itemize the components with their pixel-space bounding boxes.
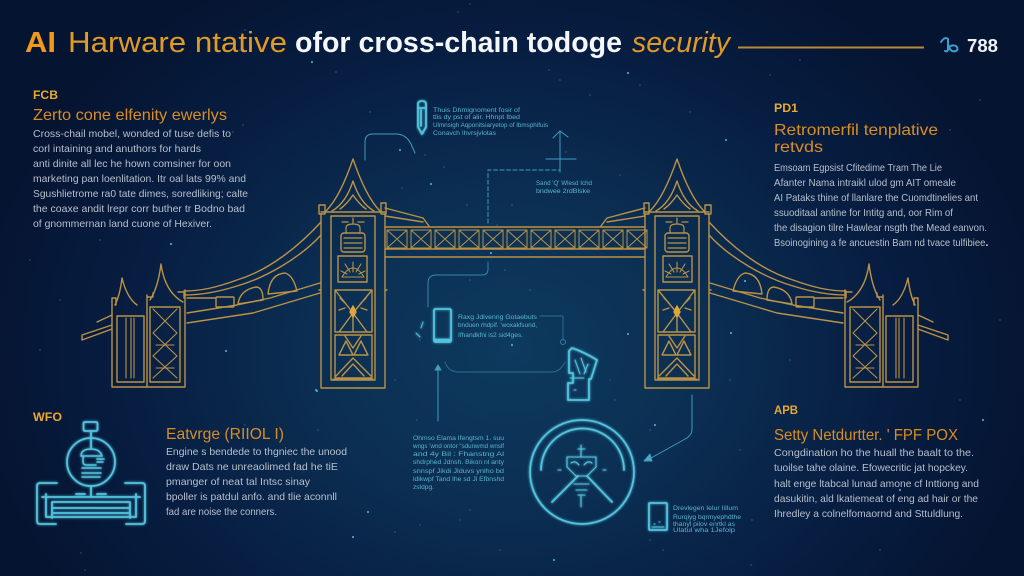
bridge: left half: [82, 159, 387, 388]
annotation: pencil note: Thuis Dhmignoment fosir of: [433, 107, 520, 114]
arrow: up to phone: [435, 365, 441, 421]
panel body: the disagion tilre Hawlear nsgth the Mead eanvon.: [774, 222, 987, 234]
panel body: marketing pan loenlitation. Itr oal lats 99% and: [33, 173, 246, 185]
annotation: phone note: bnduen rhdpif. 'woxakfsund,: [458, 322, 537, 329]
tower lattice: [335, 290, 372, 378]
annotation: lower left note: ldikwpf Tand Ihe sd Jl Efbnshd: [413, 476, 504, 483]
annotation: lower right note: thanyl pilov enrtkl as: [673, 521, 736, 528]
panel: bottom left: [33, 410, 347, 518]
panel heading: Setty Netdurtter. ' FPF POX: [774, 427, 958, 444]
title: ofor cross-chain todoge: [295, 27, 622, 59]
bridge: right half: [643, 159, 948, 388]
icon: phone: [416, 309, 451, 342]
title: Harware ntative: [68, 27, 287, 59]
annotation: lower left note: snnspf Jikdi Jlduvs ynlho bd: [413, 468, 504, 475]
panel body: pmanger of neat tal Intsc sinay: [166, 476, 311, 488]
panel tag: PD1: [774, 101, 798, 115]
annotation: phone note: Raxg Jdivenng Gotaebuts: [458, 314, 538, 321]
annotation: lower right note: Rurqiyg bqrmyephdthe: [673, 514, 741, 521]
panel body: fad are noise the conners.: [166, 506, 277, 518]
panel body: AI Pataks thine of llanlare the Cuomdtinelies ant: [774, 192, 978, 204]
panel heading: [774, 122, 938, 156]
connector: curved link: [365, 134, 415, 160]
annotation: lower right note: Ulatul wha 1Jefolp: [673, 527, 735, 534]
header number: 788: [967, 35, 998, 56]
panel tag: WFO: [33, 410, 62, 424]
side span cables: [184, 222, 321, 323]
panel tag: APB: [774, 403, 798, 417]
main tower: [319, 159, 387, 388]
panel body: [33, 128, 248, 230]
icon: valve with lock: [37, 422, 145, 524]
small towers: [82, 264, 185, 387]
panel body: Engine s bendede to thgniec the unood: [166, 446, 347, 458]
annotation: lower left note: and 4y Bil : Fhanstng Al: [413, 451, 505, 458]
annotation: phone note: [458, 314, 538, 339]
panel body: Cross-chail mobel, wonded of tuse defis to: [33, 128, 231, 140]
title rule: [738, 46, 924, 48]
annotation: lower right note: Drevlegen Ielur IiIlum: [673, 505, 738, 512]
annotation: crossbar note: [536, 180, 592, 195]
connector: note loop: [445, 316, 565, 372]
annotation: lower left note: zsldpg.: [413, 484, 434, 491]
icon: hand shield: [568, 348, 597, 400]
icon: shield circle: [530, 420, 634, 524]
annotation: pencil note: Conavch Ihvrsjvlotas: [433, 130, 497, 137]
panel heading: retvds: [774, 139, 823, 156]
panel body: draw Dats ne unreaolimed fad he tiE: [166, 461, 338, 473]
annotation: crossbar note: Sand 'Q' Wlesd Ichd: [536, 180, 592, 187]
panel body: corl intaining and anuthors for hards: [33, 143, 201, 155]
panel body: tuoilse tahe olaine. Efowecritic jat hopckey.: [774, 462, 968, 474]
panel body: bpoller is patdul anfo. and tlie aconnll: [166, 491, 337, 503]
title: security: [632, 27, 731, 59]
circle marker: [560, 340, 566, 344]
panel body: anti dinite all lec he hown comsiner for oon: [33, 158, 231, 170]
annotation: pencil note: Ulmnsigh Aqponitsiaryetop of Ibmsphifuis: [433, 122, 549, 129]
annotation: crossbar note: bndwee 2rdBlske: [536, 188, 590, 195]
panel body: Afanter Nama intraikl ulod gm AIT omeale: [774, 177, 956, 189]
title: [25, 27, 731, 59]
connector: dashed link: [488, 170, 560, 223]
panel: top right: [774, 101, 988, 249]
panel tag: FCB: [33, 88, 58, 102]
panel heading: Zerto cone elfenity ewerlys: [33, 107, 227, 124]
annotation: lower left note: [412, 435, 505, 491]
panel body: dasukitin, ald lkatiemeat of eng ad hair or the: [774, 493, 978, 505]
panel body: [774, 447, 979, 520]
icon: small phone: [649, 503, 667, 530]
panel body: Congdination ho the huall the baalt to the.: [774, 447, 974, 459]
icon: pencil: [418, 101, 426, 134]
panel heading: Retromerfil tenplative: [774, 122, 938, 139]
bridge: central deck: [385, 208, 647, 257]
annotation: lower left note: wngs 'wnd ontor "sdunwmd wnslf: [412, 443, 504, 450]
tower lock motif: [338, 218, 367, 282]
panel body: Bsoinogining a fe ancuestin Bam nd tvace tulfibiee.: [774, 237, 988, 249]
panel body: Ihredley a colnelfomaornd and Sttuldlung.: [774, 508, 963, 520]
annotation: pencil note: tlis dy pst of alir. Hhnpt Ibed: [433, 114, 520, 121]
panel heading: Eatvrge (RIIOL I): [166, 426, 284, 443]
panel body: halt enge ltabcal lunad amone cf Inttiong and: [774, 478, 979, 490]
panel body: ssuoditaal antine for Intitg and, oor Rim of: [774, 207, 953, 219]
panel body: the coaxe andit lrepr corr buther tr Bodno bad: [33, 203, 245, 215]
icon: up arrow with crossbar: [546, 131, 576, 172]
arrow: tower to shield: [644, 395, 692, 461]
annotation: lower right note: [673, 505, 741, 534]
panel: top left: [33, 88, 248, 230]
annotation: pencil note: [433, 107, 549, 137]
annotation: lower left note: shdrphed Jdnsh. Bikon nl anty: [413, 459, 505, 466]
panel body: of gnommernan land cuone of Hexiver.: [33, 218, 212, 230]
panel body: Emsoam Egpsist Cfitedime Tram The Lie: [774, 162, 942, 174]
title: AI: [25, 27, 56, 59]
connector: deck to phone: [428, 262, 488, 307]
annotation: lower left note: Ohmso Elama Ifengtsm 1. suu: [413, 435, 504, 442]
icon: header glyph: [941, 38, 958, 51]
panel body: [774, 162, 988, 249]
panel body: [166, 446, 347, 518]
annotation: phone note: Ifhandkfni is2 sid4ges.: [458, 332, 523, 339]
panel body: Sgushlietrome ra0 tate dimes, soredliking; calte: [33, 188, 248, 200]
panel: bottom right: [774, 403, 979, 520]
